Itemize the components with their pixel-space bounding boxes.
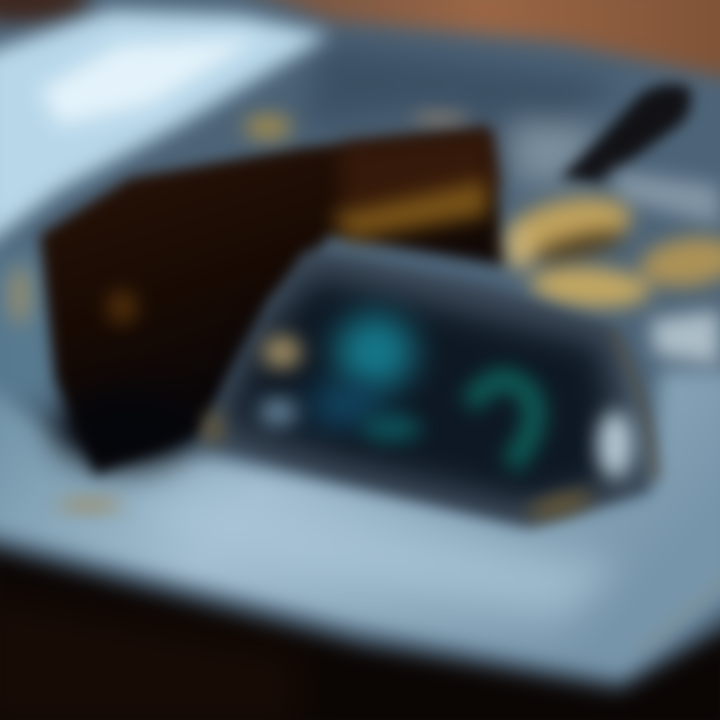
gold coins — [500, 187, 720, 311]
yellow dot on screen — [262, 335, 302, 369]
teal app blob — [335, 314, 415, 390]
gold glint at lower left of cloth — [58, 497, 122, 513]
wallet clasp — [107, 290, 137, 324]
teal lower blob — [362, 414, 422, 442]
highlight in stand — [597, 411, 633, 479]
phone stand wire — [612, 330, 655, 480]
wallet base shadow — [55, 392, 195, 468]
left edge coins — [8, 265, 32, 325]
green arc icon — [470, 380, 534, 465]
wooden band along the top edge — [0, 0, 720, 80]
wallet flap highlight — [340, 130, 500, 215]
dark table foreground — [0, 545, 720, 720]
gold corner accent — [525, 486, 595, 524]
smartphone — [200, 250, 655, 527]
wallet: dark brown leather — [8, 111, 505, 475]
soft right edge highlight — [640, 575, 720, 650]
blue app blob — [307, 385, 383, 425]
phone body — [200, 250, 650, 527]
gold tab above wallet — [244, 114, 292, 140]
stacked items at right edge — [610, 170, 720, 365]
dark object at upper right — [560, 84, 691, 182]
pale dot on screen — [258, 397, 298, 427]
table cloth in light blue — [0, 370, 720, 680]
gold left edge accent — [203, 412, 223, 444]
phone screen — [225, 275, 625, 505]
gold notes inside wallet — [330, 180, 490, 240]
paper sheet at upper left — [0, 10, 330, 250]
